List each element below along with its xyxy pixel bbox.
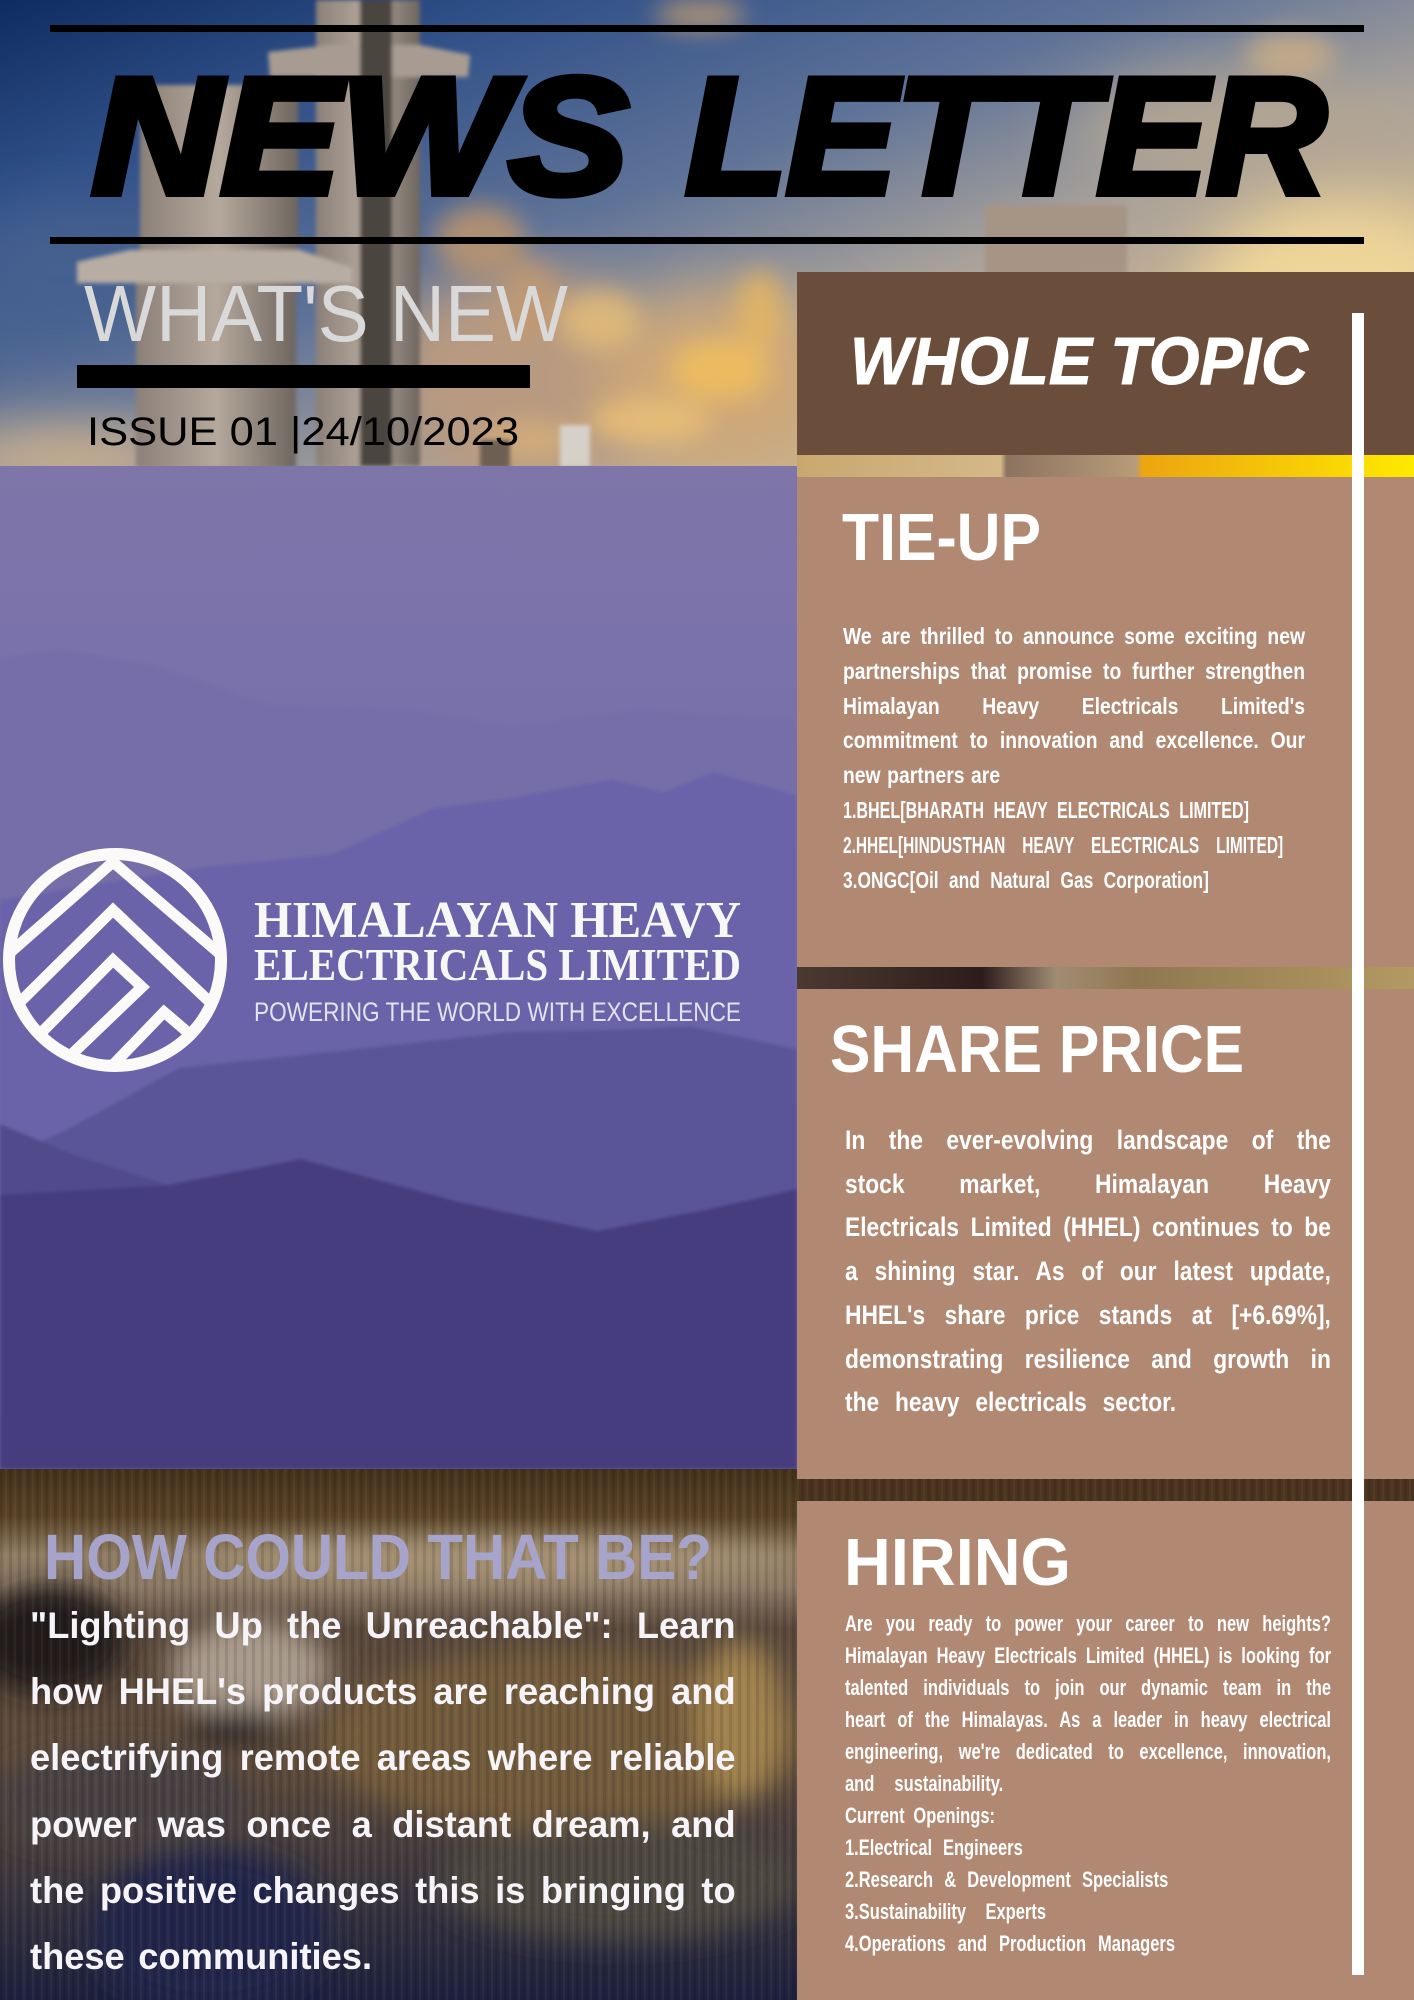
text: tie-up body: We are thrilled to announce some exciting new — [843, 623, 1305, 649]
text: tie-up body: new partners are — [843, 762, 1000, 788]
title: NEWS LETTER — [90, 60, 1329, 210]
text: hiring body: 3.Sustainability Experts — [844, 1899, 1046, 1924]
text: share price body: Electricals Limited (HHEL) continues to be — [844, 1212, 1330, 1242]
panel: hiring — [797, 1501, 1414, 2000]
text: tie-up body — [843, 623, 1305, 893]
text: tie-up body: commitment to innovation and excellence. Our — [843, 727, 1305, 753]
heading: TIE-UP: TIE-UP — [842, 500, 1041, 575]
text: share price body: the heavy electricals sector. — [844, 1387, 1176, 1417]
text: lighting up the unreachable: power was once a distant dream, and — [30, 1804, 736, 1845]
text: hiring body — [844, 1611, 1331, 1956]
vertical white rule — [1352, 313, 1364, 1975]
text: tie-up body: Himalayan Heavy Electricals Limited's — [843, 693, 1305, 719]
text: lighting up the unreachable: electrifying remote areas where reliable — [30, 1737, 736, 1778]
logo mark — [4, 854, 221, 1068]
text: hiring body: engineering, we're dedicated to excellence, innovation, — [844, 1739, 1330, 1764]
heading: WHOLE TOPIC: WHOLE TOPIC — [850, 324, 1310, 399]
panel: share price — [797, 989, 1414, 1479]
text: tie-up body: partnerships that promise to further strengthen — [843, 658, 1305, 684]
logo wordmark — [254, 892, 741, 1027]
heading: SHARE PRICE: SHARE PRICE — [830, 1012, 1244, 1087]
logo wordmark: ELECTRICALS LIMITED — [254, 939, 741, 990]
panel: company logo on purple mountains — [0, 466, 797, 1469]
text: hiring body: Current Openings: — [844, 1803, 994, 1828]
panel: whole topic header — [797, 272, 1414, 455]
text: lighting up the unreachable: the positive changes this is bringing to — [30, 1870, 736, 1911]
text: share price body: demonstrating resilience and growth in — [844, 1344, 1330, 1374]
text: lighting up the unreachable: these communities. — [30, 1936, 372, 1977]
text: tie-up body: 2.HHEL[HINDUSTHAN HEAVY ELECTRICALS LIMITED] — [843, 832, 1283, 858]
text: tie-up body: 1.BHEL[BHARATH HEAVY ELECTRICALS LIMITED] — [843, 797, 1249, 823]
text: hiring body: Himalayan Heavy Electricals Limited (HHEL) is looking for — [844, 1643, 1330, 1668]
header rules — [50, 25, 1364, 388]
text: lighting up the unreachable — [30, 1605, 736, 1977]
text: hiring body: 2.Research & Development Specialists — [844, 1867, 1168, 1892]
heading: HIRING: HIRING — [844, 1525, 1071, 1600]
text: hiring body: talented individuals to join our dynamic team in the — [844, 1675, 1330, 1700]
text: lighting up the unreachable: how HHEL's products are reaching and — [30, 1671, 736, 1712]
text: hiring body: and sustainability. — [844, 1771, 1003, 1796]
text: share price body: In the ever-evolving landscape of the — [844, 1125, 1330, 1155]
text: hiring body: heart of the Himalayas. As a leader in heavy electrical — [844, 1707, 1330, 1732]
text: share price body — [844, 1125, 1331, 1417]
issue date: ISSUE 01 |24/10/2023 — [87, 410, 519, 454]
logo wordmark: HIMALAYAN HEAVY — [254, 892, 741, 949]
text: hiring body: 1.Electrical Engineers — [844, 1835, 1022, 1860]
text: share price body: HHEL's share price stands at [+6.69%], — [844, 1300, 1330, 1330]
text: hiring body: 4.Operations and Production Managers — [844, 1931, 1174, 1956]
text: share price body: stock market, Himalayan Heavy — [844, 1169, 1330, 1199]
text: lighting up the unreachable: "Lighting Up the Unreachable": Learn — [30, 1605, 736, 1646]
panel: tie-up — [797, 477, 1414, 967]
text: hiring body: Are you ready to power your career to new heights? — [844, 1611, 1330, 1636]
text: share price body: a shining star. As of our latest update, — [844, 1256, 1330, 1286]
text: tie-up body: 3.ONGC[Oil and Natural Gas Corporation] — [843, 867, 1209, 893]
